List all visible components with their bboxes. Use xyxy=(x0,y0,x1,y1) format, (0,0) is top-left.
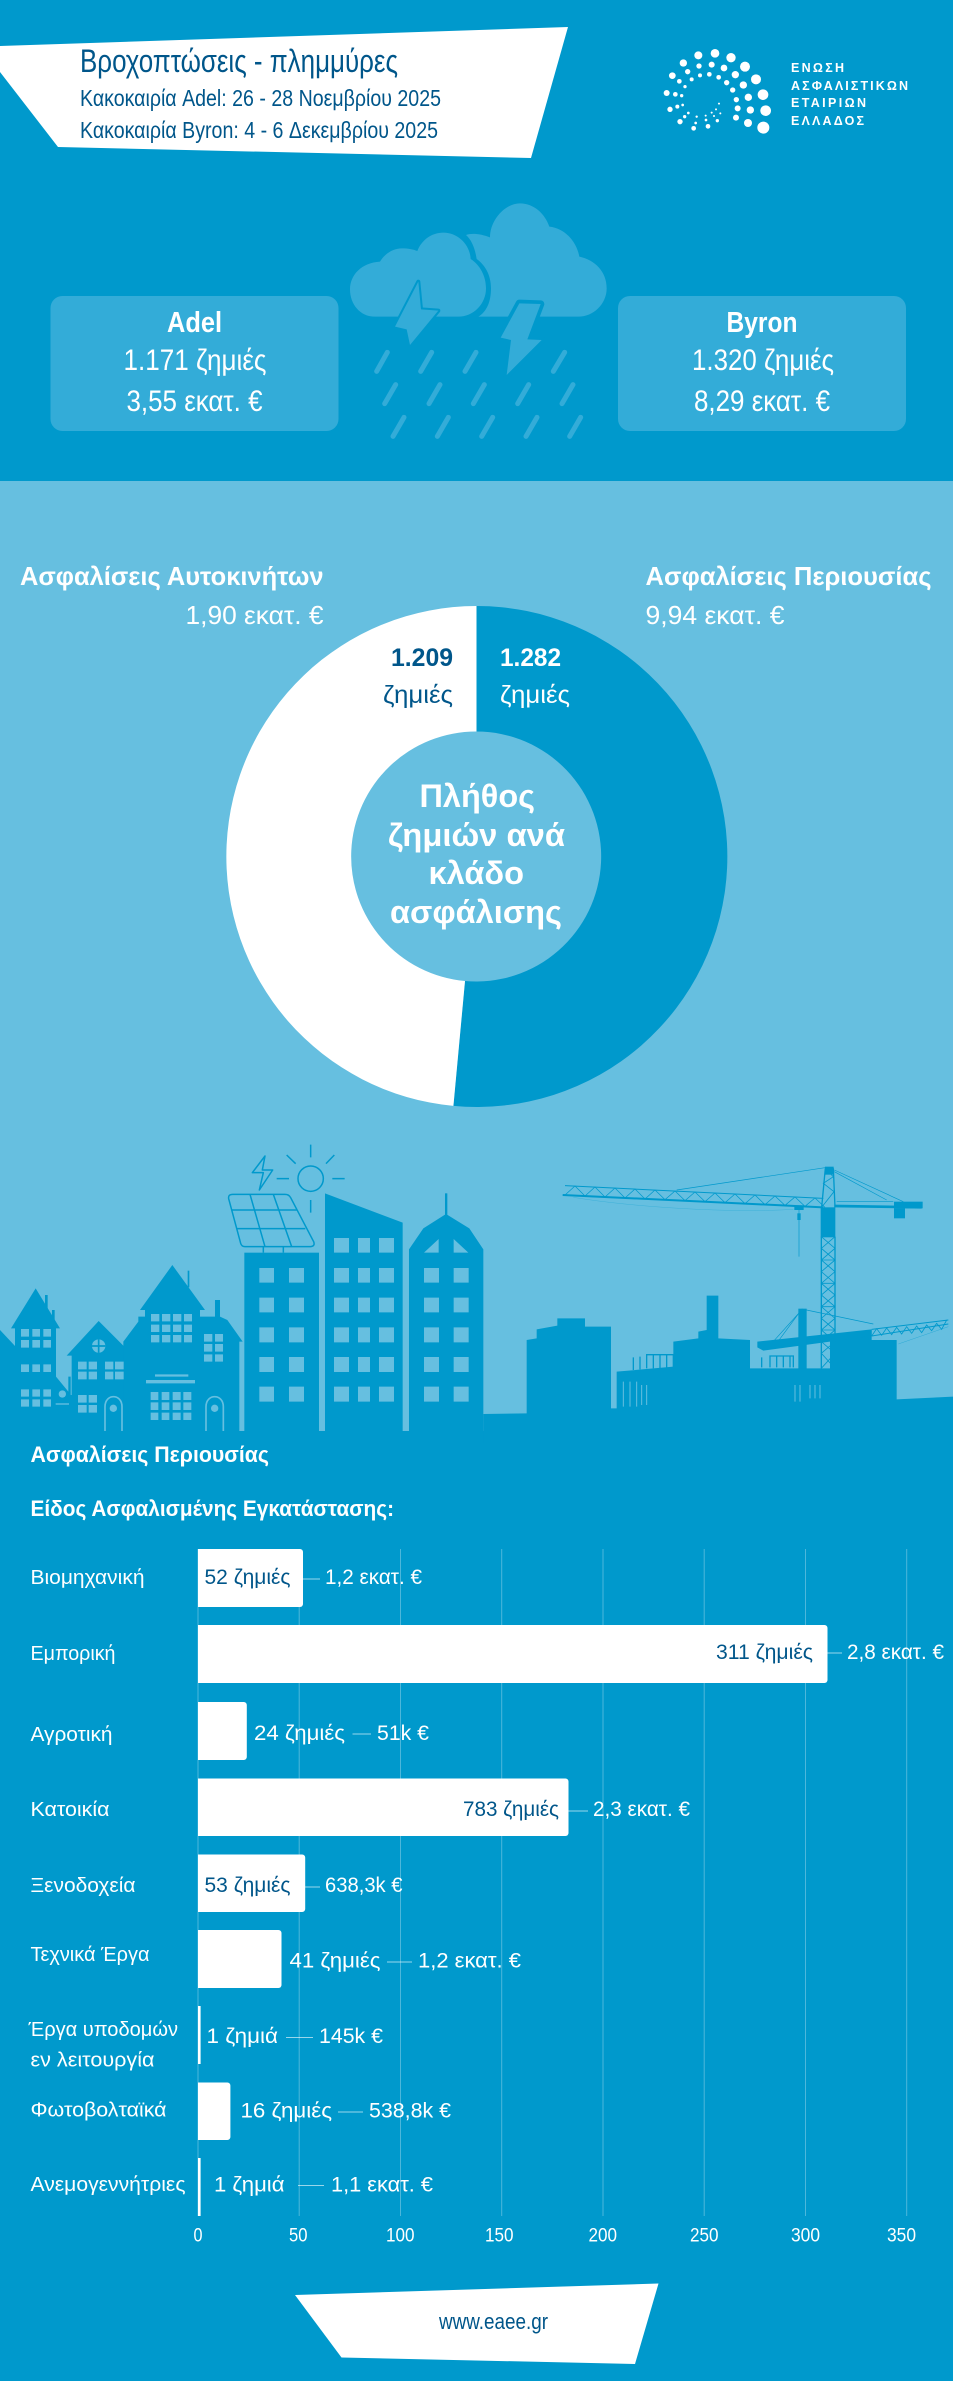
row: Τεχνικά Έργα xyxy=(30,1943,521,1972)
row: Βιομηχανική: 52 ζημιές xyxy=(204,1565,290,1589)
logo wordmark: ΕΤΑΙΡΙΩΝ xyxy=(791,96,866,110)
row: Εμπορική: 2,8 εκατ. € xyxy=(847,1640,944,1664)
x axis labels: 50 xyxy=(289,2226,308,2246)
logo: Hellenic Association of Insurance Companies xyxy=(664,49,908,134)
motor claims value: ζημιές xyxy=(383,681,453,709)
row: Έργα υποδομών εν λειτουργία xyxy=(28,2018,383,2072)
heading: motor insurance: 1,90 εκατ. € xyxy=(186,600,324,630)
donut segment: motor xyxy=(226,606,476,1106)
logo wordmark: ΕΝΩΣΗ xyxy=(791,61,844,75)
section heading: property insurance: Ασφαλίσεις Περιουσίας xyxy=(30,1442,269,1467)
row: Κατοικία: 783 ζημιές xyxy=(463,1797,559,1821)
donut center label xyxy=(388,778,565,930)
Adel claims: 1.171 ζημιές xyxy=(124,344,266,377)
row: Βιομηχανική: 1,2 εκατ. € xyxy=(325,1565,422,1589)
row: Βιομηχανική xyxy=(30,1565,422,1589)
title banner xyxy=(0,27,568,158)
x axis labels: 0 xyxy=(194,2226,202,2246)
x axis labels: 300 xyxy=(791,2226,820,2246)
row: Ανεμογεννήτριες: Ανεμογεννήτριες xyxy=(30,2173,186,2196)
row: Φωτοβολταϊκά: 16 ζημιές xyxy=(240,2098,332,2122)
donut chart: claims per insurance line xyxy=(226,606,727,1107)
row: Ξενοδοχεία: 638,3k € xyxy=(325,1873,403,1897)
logo wordmark: ΕΛΛΑΔΟΣ xyxy=(791,114,864,128)
donut center label: Πλήθος xyxy=(420,778,535,814)
row: Έργα υποδομών εν λειτουργία: εν λειτουργία xyxy=(30,2048,155,2072)
logo wordmark xyxy=(791,61,908,128)
building windows xyxy=(21,1238,469,1420)
motor claims value: 1.209 xyxy=(391,644,453,672)
heading: property insurance: 9,94 εκατ. € xyxy=(646,600,785,630)
icon: tower crane xyxy=(563,1168,948,1368)
Byron amount: 8,29 εκατ. € xyxy=(694,385,830,418)
motor claims value xyxy=(383,644,453,709)
property claims value: 1.282 xyxy=(500,644,561,672)
donut center label: ζημιών ανά xyxy=(388,817,565,853)
subtitle: Byron dates: Κακοκαιρία Byron: 4 - 6 Δεκεμβρίου 2025 xyxy=(80,117,438,143)
property claims value: ζημιές xyxy=(500,681,570,709)
row: Αγροτική xyxy=(30,1721,429,1746)
row: Έργα υποδομών εν λειτουργία: 145k € xyxy=(319,2024,383,2048)
heading: property insurance xyxy=(646,561,932,630)
footer banner xyxy=(295,2284,658,2364)
row: Ανεμογεννήτριες: 1,1 εκατ. € xyxy=(331,2172,433,2196)
panel: Adel xyxy=(50,296,338,431)
Byron heading: Byron xyxy=(726,307,798,339)
row: Τεχνικά Έργα: 41 ζημιές xyxy=(290,1948,380,1972)
icon: logo dot spiral xyxy=(664,49,771,134)
heading: motor insurance xyxy=(20,561,324,630)
bars xyxy=(198,1549,828,2216)
row: Εμπορική: 311 ζημιές xyxy=(716,1640,813,1664)
donut center label: ασφάλισης xyxy=(390,894,562,930)
scaffolding detail xyxy=(623,1382,820,1407)
row: Κατοικία xyxy=(30,1797,690,1821)
row: Κατοικία: 2,3 εκατ. € xyxy=(593,1797,690,1821)
row: Ξενοδοχεία: 53 ζημιές xyxy=(204,1873,290,1897)
x axis labels: 200 xyxy=(588,2226,617,2246)
bar chart: claims by installation type xyxy=(28,1549,944,2246)
background: light middle band xyxy=(0,481,953,1431)
row: Βιομηχανική: Βιομηχανική xyxy=(30,1566,144,1589)
row: Κατοικία: Κατοικία xyxy=(30,1798,110,1821)
section subheading: installation type: Είδος Ασφαλισμένης Εγκατάστασης: xyxy=(30,1496,394,1521)
Adel heading: Adel xyxy=(167,307,222,339)
row: Αγροτική: 51k € xyxy=(377,1721,429,1745)
x axis labels xyxy=(194,2226,916,2246)
row: Ξενοδοχεία xyxy=(30,1873,403,1897)
title: Βροχοπτώσεις - πλημμύρες xyxy=(80,43,398,79)
donut center label: κλάδο xyxy=(428,855,524,891)
row: Έργα υποδομών εν λειτουργία: 1 ζημιά xyxy=(206,2024,278,2048)
Adel amount: 3,55 εκατ. € xyxy=(126,385,263,418)
icon: storm clouds with lightning and rain xyxy=(350,203,607,436)
skyline: houses, apartments and solar panel xyxy=(0,1145,484,1441)
subtitle: Adel dates: Κακοκαιρία Adel: 26 - 28 Νοεμβρίου 2025 xyxy=(80,85,441,111)
donut segment: property xyxy=(453,606,727,1107)
row: Φωτοβολταϊκά: 538,8k € xyxy=(369,2098,451,2122)
row: Τεχνικά Έργα: Τεχνικά Έργα xyxy=(30,1943,150,1966)
skyline: construction site with cranes xyxy=(483,1167,953,1443)
x axis labels: 150 xyxy=(485,2226,514,2246)
row: Εμπορική: Εμπορική xyxy=(30,1642,116,1665)
row: Αγροτική: 24 ζημιές xyxy=(254,1721,345,1745)
row: Τεχνικά Έργα: 1,2 εκατ. € xyxy=(418,1948,521,1972)
x axis labels: 100 xyxy=(386,2226,414,2246)
row: Φωτοβολταϊκά: Φωτοβολταϊκά xyxy=(30,2098,167,2122)
panel: Byron xyxy=(618,296,906,431)
property claims value xyxy=(500,644,570,709)
row: Φωτοβολταϊκά xyxy=(30,2098,451,2122)
website link text: www.eaee.gr xyxy=(438,2309,548,2334)
row: Ξενοδοχεία: Ξενοδοχεία xyxy=(30,1874,136,1897)
row: Αγροτική: Αγροτική xyxy=(30,1723,112,1746)
x axis labels: 250 xyxy=(690,2226,718,2246)
Byron claims: 1.320 ζημιές xyxy=(692,344,834,377)
row: Ανεμογεννήτριες: 1 ζημιά xyxy=(214,2172,284,2196)
logo wordmark: ΑΣΦΑΛΙΣΤΙΚΩΝ xyxy=(791,79,908,93)
heading: property insurance: Ασφαλίσεις Περιουσίας xyxy=(646,561,932,591)
row: Ανεμογεννήτριες xyxy=(30,2172,433,2196)
row: Έργα υποδομών εν λειτουργία: Έργα υποδομών xyxy=(28,2018,178,2041)
x axis labels: 350 xyxy=(887,2226,916,2246)
row: Εμπορική xyxy=(30,1640,944,1665)
icon: solar panel with sun and bolt xyxy=(229,1145,345,1253)
heading: motor insurance: Ασφαλίσεις Αυτοκινήτων xyxy=(20,561,324,591)
